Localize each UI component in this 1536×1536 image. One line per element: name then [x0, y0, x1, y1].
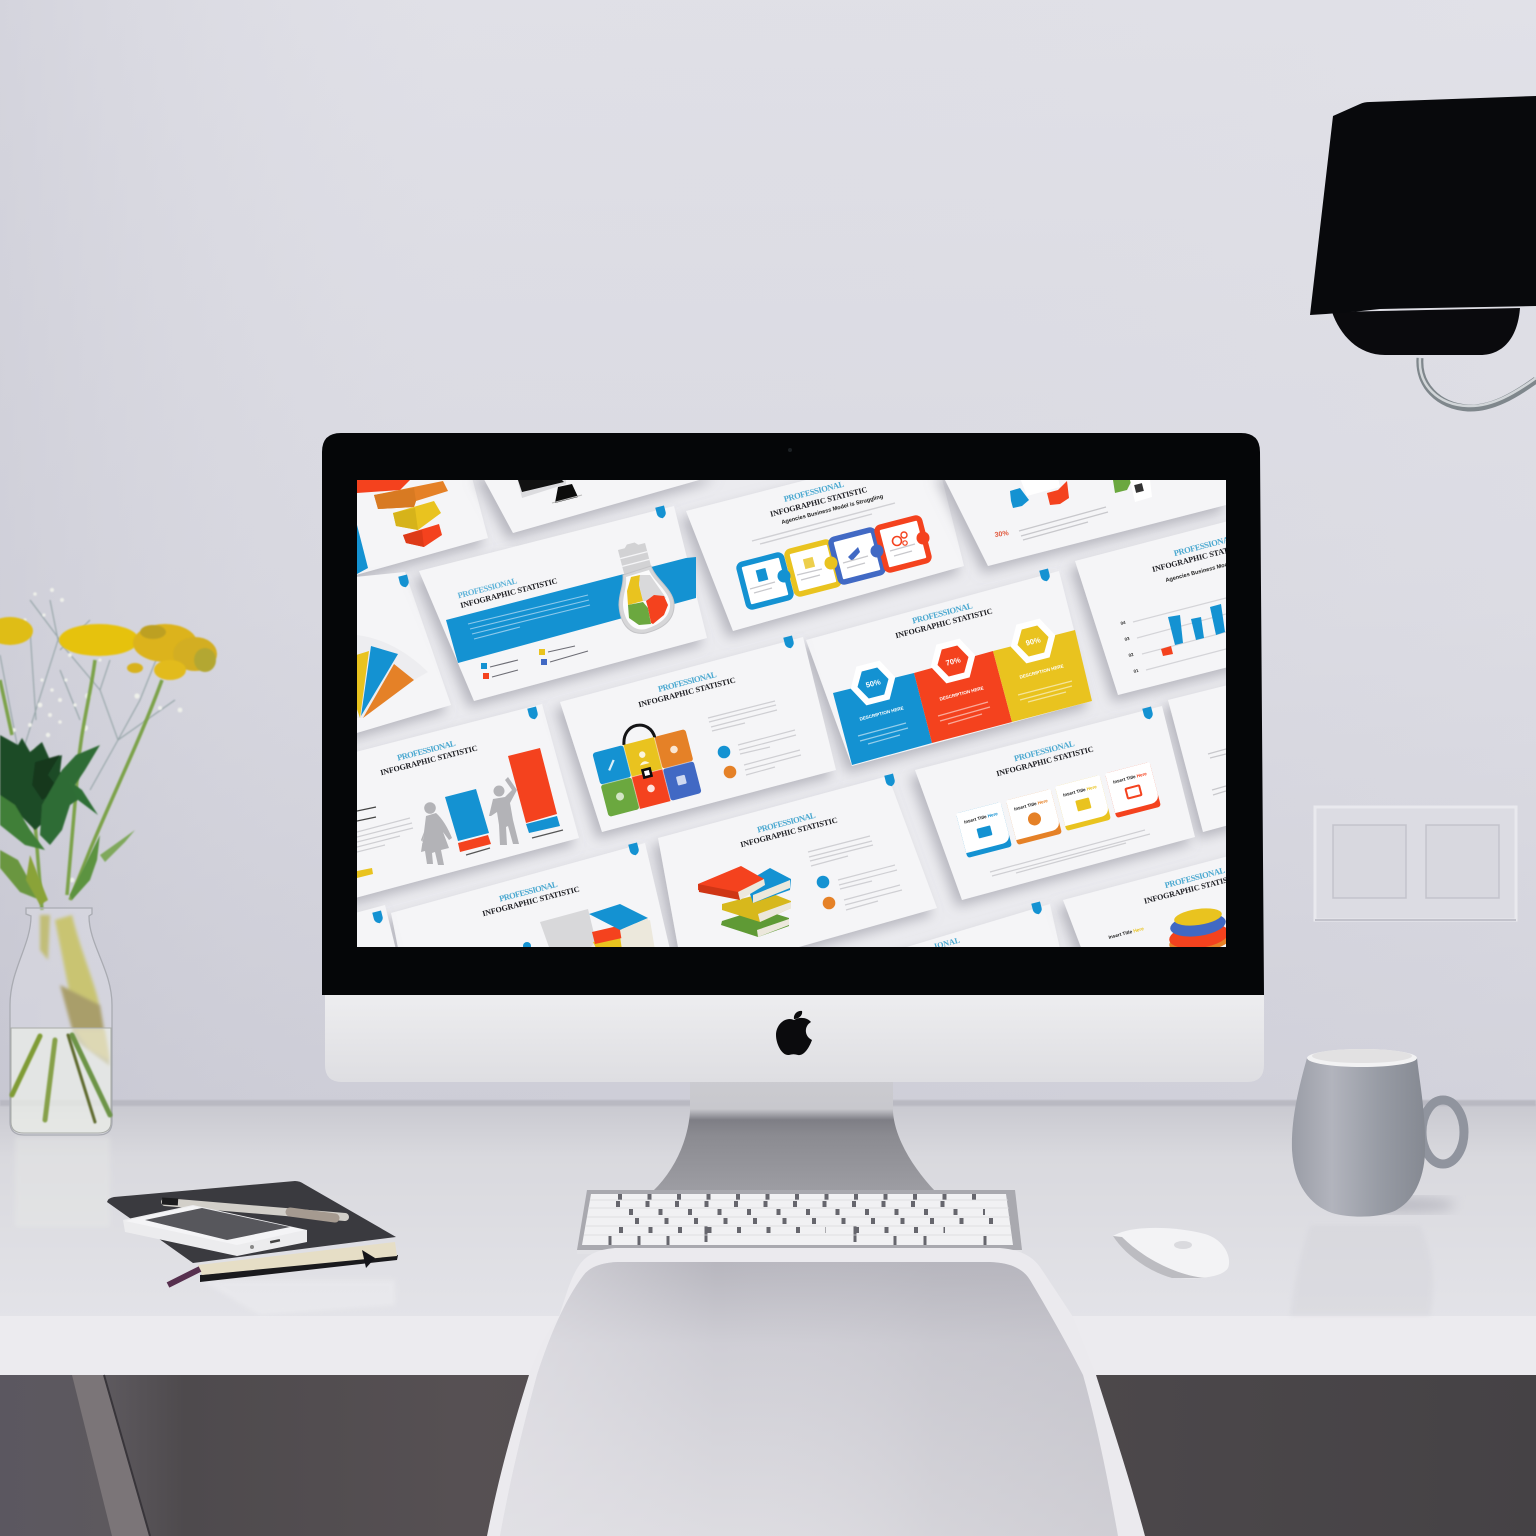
axis labels [1120, 620, 1140, 674]
axis labels: 01 [1133, 668, 1140, 674]
card yellow [1055, 775, 1111, 831]
slide title: INFOGRAPHIC STATISTIC [637, 675, 737, 709]
fan wedges [357, 646, 414, 718]
hexagon 70%: 70% [945, 655, 962, 668]
slide title: PROFESSIONAL [1164, 865, 1226, 890]
slide title: PROFESSIONAL [756, 810, 817, 835]
legend [481, 646, 588, 679]
green stems [0, 660, 162, 910]
slide title: INFOGRAPHIC STATISTIC [894, 606, 994, 640]
white tile [1021, 480, 1060, 496]
bulb glass [619, 566, 674, 633]
badge [628, 843, 640, 856]
notebook cover [107, 1181, 396, 1263]
bag handle [624, 725, 655, 745]
chair seat shading [500, 1262, 1118, 1536]
badge [372, 911, 384, 924]
leaves [0, 735, 135, 905]
slide: bag [560, 636, 836, 832]
bar captions [466, 830, 563, 855]
slide: agencies business model [686, 447, 964, 631]
red bar [508, 748, 557, 823]
grid lines [1133, 598, 1226, 670]
body text [468, 595, 590, 639]
stems in water [12, 1035, 110, 1122]
chair seat panel [500, 1262, 1118, 1536]
hexagon 90%: 90% [1025, 635, 1042, 648]
slide title: INFOGRAPHIC STATISTIC [769, 485, 868, 519]
bulb [617, 540, 674, 633]
slide title: PROFESSIONAL [911, 600, 974, 626]
key gaps [610, 1197, 995, 1245]
bag body [592, 729, 702, 817]
slide: bulb [419, 506, 707, 701]
slide title: PROFESSIONAL [498, 879, 559, 904]
axis labels: 04 [1120, 620, 1127, 626]
blue footer [526, 816, 560, 833]
white label with icon [1130, 480, 1152, 502]
card orange: Insert Title Here [1013, 798, 1049, 812]
monitor bezel [322, 433, 1264, 995]
slide: pyramid [357, 480, 488, 577]
ribbon [168, 1269, 200, 1285]
step connectors [778, 532, 930, 582]
mouse logo [1174, 1241, 1192, 1249]
description lines [752, 503, 895, 544]
bulb cap [618, 542, 651, 574]
dark icon [1134, 483, 1144, 493]
icon: man [489, 777, 519, 845]
red column [914, 651, 1012, 743]
axis labels: 03 [1124, 636, 1131, 642]
slide title: INFOGRAPHIC STATISTIC [1143, 872, 1242, 906]
blue tile [1010, 488, 1029, 508]
screen with tilted presentation slides [357, 480, 1226, 947]
dot [523, 942, 531, 950]
slide title: PROFESSIONAL [783, 479, 845, 504]
camera dot [788, 448, 792, 452]
card red: Insert Title Here [1112, 771, 1148, 785]
paper [540, 909, 598, 950]
card blue: Insert Title Here [963, 811, 999, 825]
slide title: PROFESSIONAL [1013, 738, 1076, 763]
slide title: INFOGRAPHIC STATISTIC [1151, 540, 1250, 574]
blue band [446, 557, 696, 663]
bulb puzzle pieces [627, 575, 643, 605]
card blue [956, 802, 1012, 858]
apple logo [776, 1011, 812, 1055]
monitor chin [325, 990, 1264, 1082]
slide title: INFOGRAPHIC STATISTIC [995, 744, 1095, 778]
badge [527, 707, 539, 720]
subtitle: Agencies Business Model is Struggling [781, 494, 884, 526]
badge [884, 774, 896, 787]
slide: monitor picture [479, 470, 720, 533]
slide title: PROFESSIONAL [396, 738, 457, 763]
slide: hexagon percentages [806, 569, 1092, 766]
slide title: INFOGRAPHIC STATISTIC [739, 815, 839, 849]
text lines [808, 836, 902, 910]
hexagon 50% [846, 658, 900, 708]
slide: bar chart [1075, 518, 1268, 695]
green tile [1113, 480, 1132, 493]
slide: small left [340, 905, 398, 958]
side labels [357, 807, 376, 821]
slide: insert title cards [915, 706, 1195, 900]
text lines [708, 701, 801, 775]
mug body [1292, 1058, 1425, 1217]
badge [1039, 569, 1051, 582]
insert title: Insert Title Here [1108, 926, 1145, 941]
desk [0, 1100, 1536, 1536]
step icons [756, 532, 907, 582]
book stack [698, 866, 791, 937]
slide: top right [933, 480, 1226, 577]
column descriptions: DESCRIPTION HERE [939, 685, 984, 702]
red footer [458, 835, 491, 852]
side text [357, 818, 413, 852]
key row lines [584, 1200, 1012, 1235]
yellow flower left [0, 617, 33, 645]
chair shell [487, 1248, 1145, 1536]
card red [1105, 762, 1161, 818]
slide: fan chart [357, 572, 450, 744]
card orange [1006, 789, 1062, 845]
mug rim [1307, 1049, 1417, 1067]
slide: people bar chart [340, 704, 579, 902]
desk reflections [15, 1137, 1433, 1316]
yellow flower centre [59, 624, 139, 656]
badge [398, 574, 409, 588]
badge [1142, 707, 1154, 720]
water [11, 1028, 111, 1133]
step frames [738, 517, 930, 608]
notebook pages [198, 1242, 397, 1275]
wall light switch [1315, 807, 1516, 920]
column descriptions: DESCRIPTION HERE [859, 705, 904, 722]
subtitle: Agencies Business Model is Struggling [1165, 552, 1268, 584]
slide title: INFOGRAPHIC STATISTIC [379, 743, 479, 777]
hexagon 50%: 50% [865, 677, 882, 690]
badge [783, 636, 795, 649]
slide title: PROFESSIONAL [457, 575, 518, 600]
yellow flower right [127, 624, 217, 680]
pen [162, 1201, 345, 1218]
phone [123, 1205, 307, 1256]
pebble stack [1168, 906, 1232, 956]
vase with flowers [0, 588, 217, 1135]
hexagon 90% [1006, 616, 1060, 666]
yellow tag [357, 868, 373, 878]
axis labels: 02 [1128, 652, 1135, 658]
monitor [322, 433, 1264, 1082]
slide: bottom center [870, 902, 1062, 958]
text lines [1019, 507, 1108, 540]
slide title: INFOGRAPHIC STATISTIC [481, 884, 581, 918]
badge [655, 506, 666, 518]
mouse [1113, 1228, 1229, 1278]
book stack [589, 904, 655, 950]
card yellow: Insert Title Here [1062, 784, 1098, 798]
slide title: PROFESSIONAL [1173, 533, 1235, 558]
baby's breath stems [0, 600, 175, 790]
column descriptions: DESCRIPTION HERE [1019, 663, 1064, 680]
slide: paper and books [391, 843, 672, 958]
baby's breath blossoms [2, 588, 182, 882]
description lines [990, 830, 1150, 876]
chair [487, 1248, 1145, 1536]
keyboard [577, 1190, 1022, 1254]
mug shadow [1345, 1197, 1455, 1213]
yellow column [993, 630, 1092, 722]
notebook cover bottom [200, 1255, 398, 1282]
bars [1161, 604, 1225, 656]
fan backdrop [357, 635, 428, 718]
book bullets [817, 876, 829, 888]
slide: stacked books [658, 774, 937, 958]
blue bar [445, 789, 489, 841]
badge [1031, 902, 1043, 915]
percentage: 30% [994, 530, 1010, 539]
slide: sliver right [1168, 682, 1240, 832]
blue column [833, 673, 932, 765]
bag bullets [718, 746, 730, 758]
fern in vase [40, 915, 110, 1066]
monitor stand [653, 1080, 935, 1191]
step text [750, 544, 915, 593]
partial title: IONAL [933, 936, 961, 951]
vase glass [10, 908, 112, 1135]
notebook [107, 1181, 398, 1285]
slide title: INFOGRAPHIC STATISTIC [459, 576, 559, 610]
mug [1292, 1049, 1464, 1217]
wall lamp [1310, 96, 1536, 408]
slide: pebbles [1063, 853, 1242, 958]
icon: woman [421, 802, 452, 865]
column descriptions [859, 663, 1064, 722]
red tile [1047, 481, 1069, 505]
column text [858, 681, 1072, 744]
hexagon 70% [926, 636, 980, 686]
mug handle [1422, 1100, 1464, 1164]
wall background [0, 0, 1536, 1110]
elastic [362, 1250, 375, 1268]
slide title: PROFESSIONAL [657, 669, 718, 694]
